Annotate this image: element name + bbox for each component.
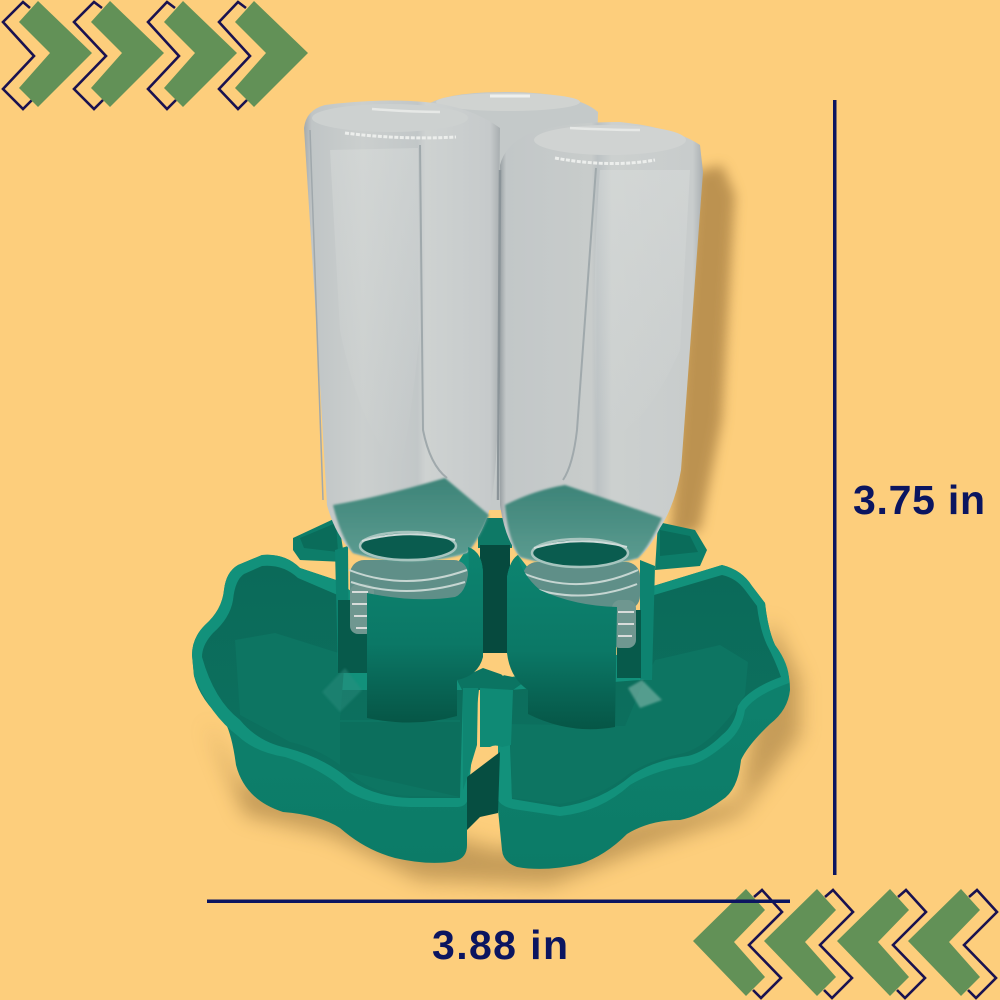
panel: right bottle holder back: [507, 555, 662, 708]
side strip: [335, 546, 349, 673]
icon: right glass bottle: [498, 122, 703, 567]
panel: centre spine and gap: [457, 653, 527, 830]
dark tray end: [467, 752, 500, 830]
left bottle cap: [312, 104, 468, 132]
right tray outer wall: [498, 565, 790, 869]
icon: left glass bottle: [304, 101, 500, 561]
right bottle seam: [563, 168, 596, 480]
left glass splash: [322, 668, 362, 712]
icon: threaded neck right: [523, 562, 640, 648]
left bottle mouth: [360, 532, 456, 560]
spine strip left: [463, 688, 478, 790]
panel: right tray: [498, 565, 790, 869]
panel: left tray: [192, 555, 480, 863]
right bottle cap: [534, 125, 686, 155]
right bottle mouth: [532, 539, 628, 567]
right glass splash: [628, 680, 662, 708]
panel: left bottle holder back: [322, 546, 483, 712]
height dimension line: [833, 100, 836, 875]
icon: back glass bottle: [425, 92, 598, 510]
right tray rim: [498, 565, 789, 816]
right tray raised floor: [510, 645, 748, 804]
left tray raised floor: [235, 633, 460, 797]
holder back arc: [507, 555, 545, 680]
right bottle base tint: [505, 485, 662, 566]
panel: right holder front plate: [507, 555, 617, 729]
left bottle base tint: [333, 478, 489, 562]
right tray inner basin: [510, 575, 781, 807]
holder back arc: [440, 547, 483, 680]
spine arrow head: [457, 668, 527, 690]
height label: 3.75 in: [853, 477, 985, 523]
icon: back tray: [293, 517, 707, 653]
panel: left holder front plate: [367, 547, 483, 723]
width dimension line: [207, 900, 790, 903]
left tray rim: [192, 555, 478, 807]
icon: bottom-right chevrons: [693, 889, 997, 998]
left tray outer wall: [192, 555, 480, 863]
shadow: product drop shadow: [205, 165, 800, 885]
side strip: [640, 560, 655, 680]
spine strip right: [480, 688, 513, 747]
icon: top-left chevrons: [3, 1, 308, 109]
left tray inner basin: [202, 566, 463, 798]
icon: threaded neck left: [349, 560, 468, 634]
width label: 3.88 in: [432, 922, 568, 968]
left bottle seam: [420, 145, 447, 478]
